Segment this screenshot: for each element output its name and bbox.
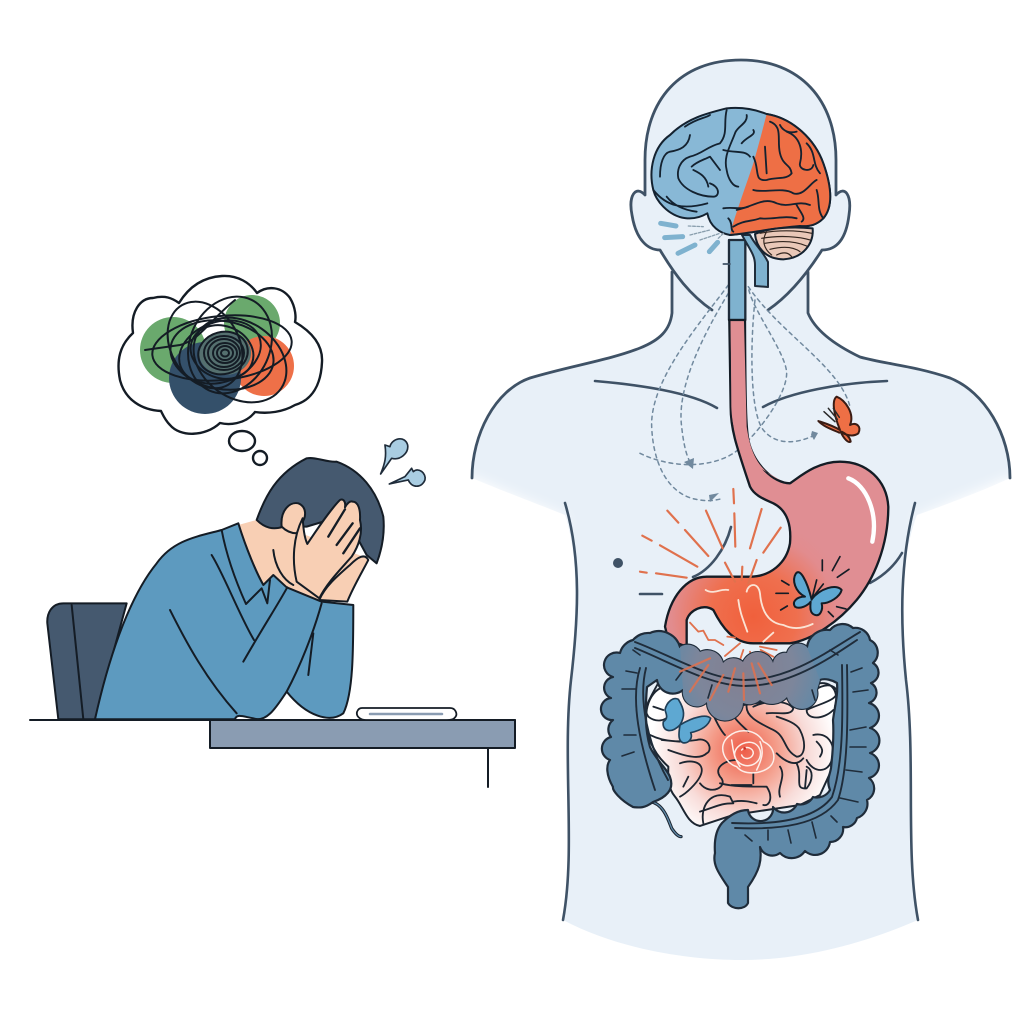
torso outline (563, 381, 918, 920)
tangled scribble (145, 283, 303, 420)
brain (651, 108, 830, 264)
front hand (294, 500, 361, 598)
stomach and esophagus (640, 240, 888, 660)
squiggle and lower burst (690, 623, 777, 660)
nerve arrowheads (684, 431, 818, 502)
stomach highlight (848, 478, 874, 542)
esophagus blue upper part (729, 240, 745, 320)
hair (257, 458, 384, 563)
thought bubble (119, 276, 322, 465)
cerebellum (755, 228, 813, 259)
nipple (613, 558, 623, 568)
back hand (319, 556, 368, 602)
large intestine (601, 624, 879, 908)
appendix (650, 802, 681, 837)
spinal cord and brain stem (742, 235, 768, 287)
ear (281, 503, 305, 533)
transverse colon grey tint (680, 644, 820, 721)
small intestine (646, 680, 837, 837)
blue vagal dashes (661, 223, 718, 253)
desk (30, 720, 515, 787)
blue brain folds (653, 110, 754, 232)
thought circles (140, 317, 206, 383)
stomach folds (706, 585, 813, 642)
esophagus pink upper overlay (731, 321, 780, 480)
butterfly: blue on stomach (776, 557, 849, 617)
steam puffs (381, 439, 425, 486)
tablet on desk (357, 708, 456, 720)
body silhouette (470, 60, 1012, 960)
redness rays over colon (680, 658, 772, 700)
orange brain folds (733, 122, 823, 227)
thought trail bubbles (229, 431, 255, 451)
soft fade under the arms (470, 484, 1012, 522)
rose (723, 731, 774, 773)
butterfly: blue in intestine (663, 699, 711, 743)
person: neck, head and hands (238, 439, 425, 602)
stomach body (665, 320, 888, 647)
head and shoulder outline (472, 60, 1010, 478)
person: shirt and arms (95, 523, 353, 719)
butterfly: orange (818, 397, 859, 442)
pain burst around stomach (640, 489, 781, 583)
chair (47, 603, 127, 719)
dashed nerve pathways (640, 285, 850, 501)
